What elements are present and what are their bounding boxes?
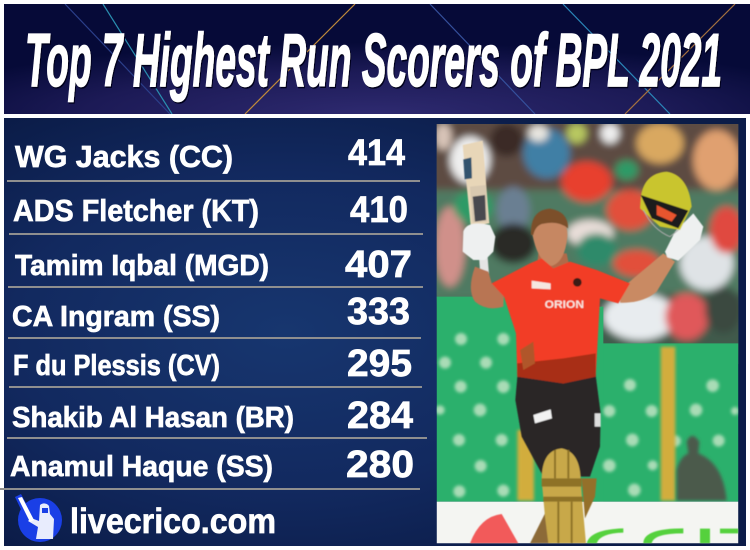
helmet (640, 172, 692, 230)
row 3: Tamim Iqbal (MGD) (15, 250, 269, 282)
crowd background (430, 120, 745, 364)
header banner (4, 4, 750, 114)
photo: batter celebrating (430, 120, 745, 543)
green stands (435, 297, 739, 502)
right arm (620, 253, 675, 303)
row 6: Shakib Al Hasan (BR) (12, 402, 294, 434)
icon: livecrico logo (15, 494, 62, 542)
row 2 (9, 189, 423, 235)
row 3: 407 (345, 244, 412, 286)
batter (463, 141, 703, 543)
bat (463, 141, 489, 226)
batting pads (582, 478, 597, 518)
right glove (665, 213, 703, 261)
row 7: 280 (346, 444, 414, 486)
shirt (492, 258, 630, 383)
neck and head (537, 252, 569, 269)
left glove (463, 223, 495, 260)
row 6 (7, 395, 427, 439)
row 2: 410 (350, 189, 408, 230)
brand name: livecrico.com (70, 502, 276, 541)
left arm (471, 267, 504, 308)
row 3 (8, 244, 423, 288)
row 4: 333 (347, 291, 410, 333)
row 1 (7, 132, 420, 182)
row 1: WG Jacks (CC) (15, 139, 233, 174)
row 4: CA Ingram (SS) (12, 301, 220, 333)
row 5: F du Plessis (CV) (13, 350, 220, 382)
advertising board (437, 502, 738, 543)
row 5 (9, 343, 422, 388)
panel: rankings (0, 118, 746, 546)
row 2: ADS Fletcher (KT) (13, 193, 259, 228)
row 7: Anamul Haque (SS) (10, 451, 273, 483)
yellow poles (517, 347, 675, 501)
row 5: 295 (347, 343, 412, 385)
row 4 (8, 291, 421, 339)
shorts (515, 370, 601, 477)
row 6: 284 (347, 395, 413, 437)
row 1: 414 (348, 132, 405, 173)
sponsor text on shirt: ORION (545, 299, 584, 311)
spectator (677, 436, 727, 501)
row 7 (0, 444, 420, 490)
